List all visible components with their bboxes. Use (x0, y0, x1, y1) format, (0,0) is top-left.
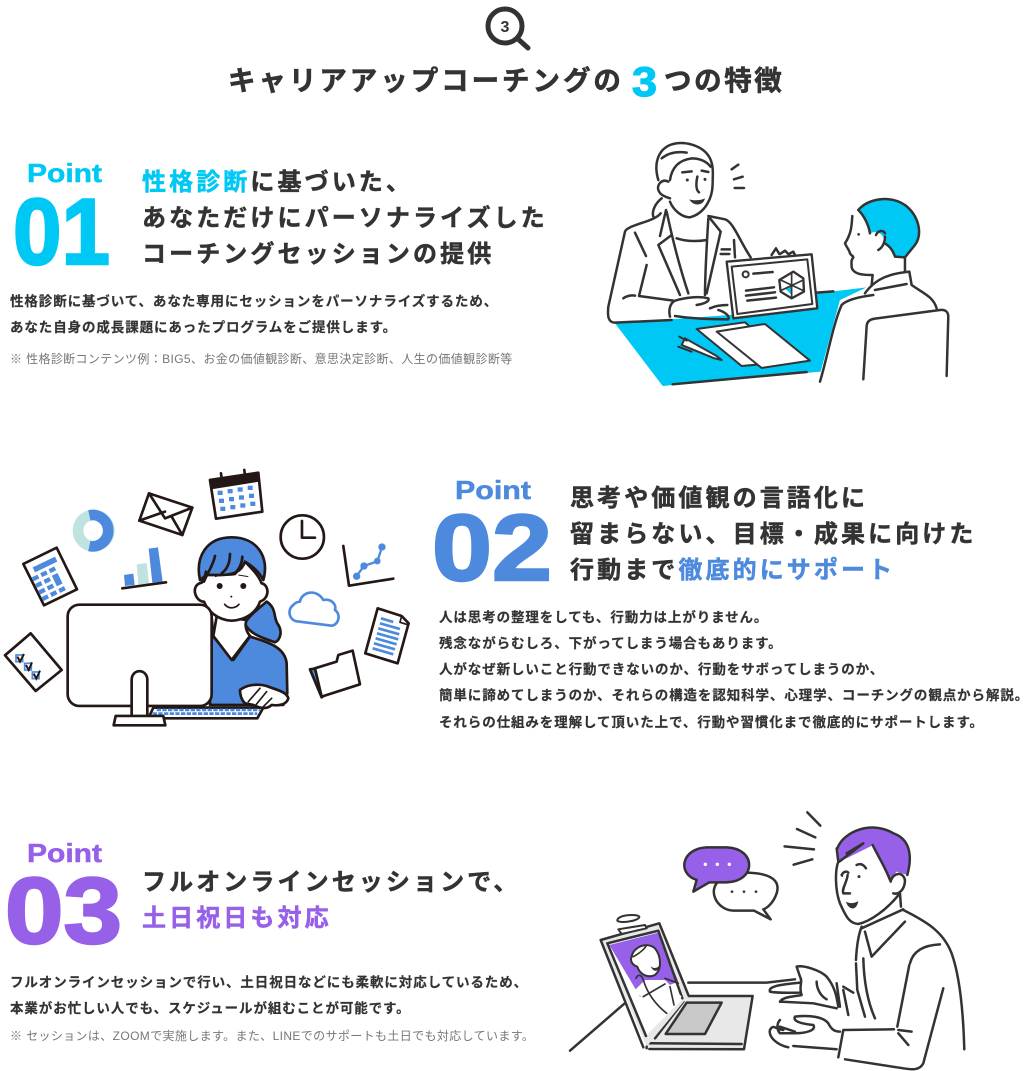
emphasis lines (785, 812, 820, 865)
icon: magnifier with number 3 (488, 9, 528, 48)
man (767, 828, 964, 1069)
point 02 body text: それらの仕組みを理解して頂いた上で、行動や習慣化まで徹底的にサポートします。 (439, 714, 984, 730)
point 02 body text: 簡単に諦めてしまうのか、それらの構造を認知科学、心理学、コーチングの観点から解説。 (439, 687, 1029, 703)
point 03 heading: フルオンラインセッションで、 (142, 869, 520, 896)
icon: envelope (139, 493, 192, 535)
point 01 heading (142, 169, 548, 268)
illustration: online session on a laptop (570, 812, 964, 1069)
icon: clock (281, 515, 324, 559)
point 02 body text (439, 609, 1029, 730)
icon: magnifier with number 3: 3 (501, 19, 510, 36)
illustration: woman at computer with office icons (5, 470, 409, 725)
point 01 heading: 性格診断に基づいた、 (142, 169, 413, 196)
point 02 heading (570, 485, 976, 584)
icon: calculator (23, 548, 77, 605)
laptop (570, 915, 766, 1051)
title (228, 58, 784, 105)
point 01 body text: 性格診断に基づいて、あなた専用にセッションをパーソナライズするため、 (10, 293, 498, 309)
point 03 body text (10, 974, 528, 1016)
illustration: consultation at a table (608, 143, 948, 386)
icon: document (365, 608, 409, 663)
point 02 heading: 思考や価値観の言語化に (570, 485, 868, 512)
icon: cloud (289, 593, 339, 626)
woman (195, 537, 287, 705)
point 01 body text: あなた自身の成長課題にあったプログラムをご提供します。 (10, 319, 397, 335)
icon: line chart (343, 543, 393, 586)
speech bubbles (684, 847, 778, 919)
point 01 note: ※ 性格診断コンテンツ例：BIG5、お金の価値観診断、意思決定診断、人生の価値観診断等 (10, 351, 513, 366)
point 02 body text: 残念ながらむしろ、下がってしまう場合もあります。 (439, 635, 783, 651)
icon: bar chart (122, 547, 166, 588)
point 02 body text: 人は思考の整理をしても、行動力は上がりません。 (439, 609, 768, 625)
icon: donut chart (78, 515, 109, 546)
point 03 heading (142, 869, 520, 932)
icon: checklist (5, 633, 62, 691)
icon: calendar (210, 470, 262, 519)
point 02 heading: 行動まで徹底的にサポート (570, 557, 895, 584)
man (858, 199, 919, 257)
monitor (68, 605, 212, 725)
chair (863, 310, 948, 379)
icon: folder (310, 651, 360, 697)
title: キャリアアップコーチングの (228, 65, 624, 96)
point 02 label: Point (455, 475, 531, 505)
point 03 body text: 本業がお忙しい人でも、スケジュールが組むことが可能です。 (10, 1000, 410, 1016)
panel: point 02 (5, 470, 1029, 730)
point 01 heading: あなただけにパーソナライズした (142, 204, 548, 232)
point 03 number: 03 (5, 858, 122, 963)
hand (240, 685, 288, 708)
panel: point 03 (5, 812, 964, 1069)
point 03 note: ※ セッションは、ZOOMで実施します。また、LINEでのサポートも土日でも対応しています。 (10, 1029, 534, 1043)
point 03 body text: フルオンラインセッションで行い、土日祝日などにも柔軟に対応しているため、 (10, 974, 528, 990)
panel: point 01 (10, 143, 948, 386)
keyboard (148, 708, 263, 718)
tablet (727, 254, 817, 318)
papers (697, 322, 790, 366)
point 02 heading: 留まらない、目標・成果に向けた (570, 521, 976, 548)
woman (656, 143, 713, 217)
point 03 heading: 土日祝日も対応 (142, 905, 332, 932)
point 03 label: Point (27, 838, 102, 868)
point 01 heading: コーチングセッションの提供 (142, 240, 494, 268)
point 02 body text: 人がなぜ新しいこと行動できないのか、行動をサボってしまうのか、 (439, 661, 884, 677)
point 02 number: 02 (432, 495, 552, 600)
title: つの特徴 (664, 65, 784, 96)
point 01 body text (10, 293, 498, 335)
point 01 label: Point (27, 158, 102, 188)
pen (678, 337, 722, 360)
title: 3 (632, 58, 657, 105)
point 01 number: 01 (13, 179, 110, 284)
